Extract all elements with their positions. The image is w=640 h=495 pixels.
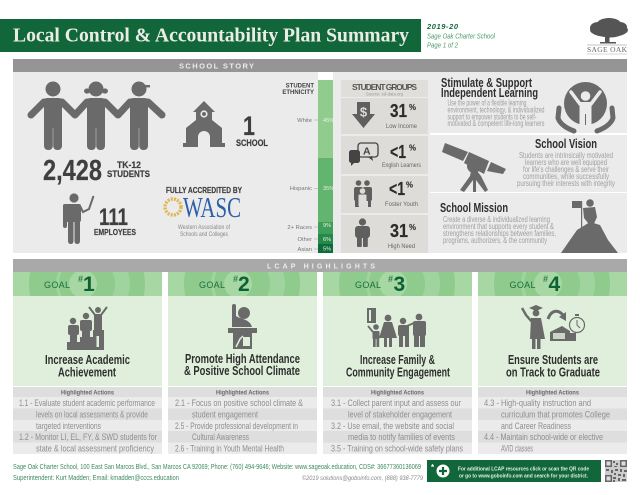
stat: english learners: %: [409, 144, 416, 152]
panel: goal 4: 4: [548, 273, 560, 296]
school year and page info: 2019-20: [426, 22, 459, 31]
stat: students: [43, 155, 150, 187]
panel: school mission: programs, authorizers, & the community: [443, 236, 547, 245]
stat: low income: Low Income: [386, 123, 417, 130]
chart: student ethnicity stacked bar: 35%: [323, 186, 334, 192]
school year and page info: Page 1 of 2: [427, 40, 459, 50]
panel: goal 1: Achievement: [58, 366, 117, 380]
panel: independent learning: environment, technology, & individualized: [448, 106, 544, 114]
stat: english learners: English Learners: [382, 162, 422, 169]
stat: low income: [352, 100, 417, 130]
panel: school vision: [430, 135, 627, 192]
accreditation: WASC: FULLY ACCREDITED BY: [166, 186, 243, 195]
panel: independent learning: support to empower students to be self-: [448, 112, 537, 122]
stat: students: STUDENTS: [107, 169, 150, 180]
QR code: [605, 460, 627, 482]
school year and page info: [426, 22, 495, 50]
chart: student ethnicity stacked bar: 6%: [323, 237, 331, 243]
stat: foster youth: [354, 178, 418, 208]
panel: goal 4: and Career Readiness: [501, 421, 571, 431]
chart: student ethnicity stacked bar: STUDENT: [286, 84, 314, 90]
icon: climber on mountain: [561, 199, 618, 253]
chart: student ethnicity stacked bar: White: [297, 118, 312, 124]
panel: goal 1: 1: [83, 273, 95, 296]
panel: goal 2: #: [233, 274, 238, 284]
panel: goal 4: 4.4 - Maintain school-wide or elective: [484, 432, 603, 442]
panel: goal 3: [323, 272, 472, 454]
logo: Sage Oak tree: [587, 18, 628, 54]
stat: high need: 31: [390, 220, 408, 241]
icon: family and doorway: [367, 308, 426, 347]
stat: one school: 1: [243, 111, 255, 141]
panel: goal 4: #: [543, 274, 548, 284]
panel: goal 1: state & local assessment proficiency: [36, 444, 154, 454]
callout: additional resources: or go to www.goboinfo.com and search for your district.: [459, 474, 588, 480]
chart: student ethnicity stacked bar: Hispanic: [290, 186, 312, 192]
panel: goal 1: Increase Academic: [45, 353, 130, 367]
panel: student groups: Source: ed-data.org: [366, 92, 403, 98]
panel: school vision: pursuing their interests with integrity: [517, 179, 615, 188]
panel: goal 3: media to notify families of events: [348, 432, 455, 442]
icon: three children: [31, 82, 162, 150]
title banner: [0, 19, 421, 52]
panel: student groups: STUDENT GROUPS: [352, 82, 417, 92]
panel: goal 3: GOAL: [355, 280, 381, 290]
stat: students: TK-12: [117, 160, 141, 171]
panel: goal 4: 4.3 - High-quality instruction and: [484, 398, 591, 408]
stat: foster youth: <1: [389, 178, 405, 199]
logo: Sage Oak tree: SAGE OAK: [587, 45, 628, 54]
panel: goal 4: on Track to Graduate: [506, 366, 600, 380]
panel: goal 3: 3.5 - Training on school-wide safety plans: [331, 444, 463, 454]
panel: school vision: learners who are well equipped: [525, 158, 607, 167]
panel: goal 4: GOAL: [510, 280, 536, 290]
callout: additional resources: [427, 460, 601, 482]
stat: english learners: <1: [390, 141, 406, 162]
stat: one school: [236, 111, 268, 149]
panel: independent learning: motivated & competent life-long learners: [448, 119, 545, 128]
icon: schoolhouse: [183, 101, 225, 147]
panel: goal 2: GOAL: [199, 280, 225, 290]
panel: goal 3: Increase Family &: [360, 353, 435, 367]
heading: school story: [13, 59, 627, 72]
panel: goal 3: 3.2 - Use email, the website and social: [331, 421, 454, 431]
icon: hands holding learner: [558, 82, 613, 131]
panel: goal 2: student engagement: [192, 410, 258, 420]
icon: students on podium: [67, 307, 107, 350]
panel: school vision: communities, while successfully: [523, 172, 609, 181]
chart: student ethnicity stacked bar: 5%: [323, 246, 331, 252]
stat: employees: 111: [99, 204, 128, 231]
panel: school vision: for life's challenges & serve their: [523, 165, 609, 174]
panel: goal 1: targeted interventions: [36, 421, 101, 431]
stat: high need: %: [409, 223, 416, 232]
chart: student ethnicity stacked bar: Asian: [297, 247, 312, 253]
panel: goal 1: Highlighted Actions: [61, 390, 114, 396]
heading: LCAP highlights: [13, 259, 627, 272]
panel: goal 1: #: [78, 274, 83, 284]
panel: goal 2: [168, 272, 317, 454]
panel: goal 3: #: [388, 274, 393, 284]
panel: goal 4: AVID classes: [501, 444, 533, 454]
panel: goal 1: 1.2 - Monitor LI, EL, FY, & SWD students for: [19, 432, 157, 442]
panel: goal 1: 1.1 - Evaluate student academic performance: [19, 398, 155, 408]
accreditation: WASC: Western Association of: [178, 225, 230, 231]
stat: low income: $: [360, 104, 368, 120]
stat: high need: High Need: [388, 243, 415, 250]
panel: goal 2: 2.5 - Provide professional development in: [175, 421, 298, 431]
stat: low income: 31: [390, 100, 407, 121]
panel: goal 4: [478, 272, 627, 454]
icon: teacher: [63, 193, 94, 244]
chart: student ethnicity stacked bar: Other: [298, 237, 312, 243]
heading: LCAP highlights: LCAP HIGHLIGHTS: [267, 264, 375, 270]
stat: foster youth: %: [406, 180, 413, 190]
stat: english learners: A: [363, 146, 371, 158]
panel: school mission: School Mission: [440, 201, 508, 215]
icon: telescope: [442, 143, 506, 192]
callout: additional resources: *: [431, 463, 435, 472]
callout: additional resources: For additional LCAP resources click or scan the QR code: [458, 466, 590, 472]
footer: contact information: [13, 462, 421, 482]
panel: student groups: [341, 80, 428, 253]
accreditation: WASC: Schools and Colleges: [180, 232, 228, 238]
panel: school mission: [430, 193, 627, 253]
heading: school story: SCHOOL STORY: [179, 62, 254, 70]
panel: goal 2: 2.6 - Training in Youth Mental Health: [175, 444, 284, 454]
panel: school mission: strengthens relationships between families,: [443, 229, 556, 238]
stat: low income: %: [409, 103, 416, 112]
chart: student ethnicity stacked bar: [282, 80, 334, 253]
panel: goal 2: Highlighted Actions: [216, 390, 269, 396]
panel: goal 1: levels on local assessments & provide: [36, 410, 148, 420]
icon: graduate, school and clock: [522, 305, 584, 349]
panel: goal 2: & Positive School Climate: [184, 364, 300, 378]
panel: goal 3: Community Engagement: [346, 366, 451, 380]
footer: contact information: Sage Oak Charter School, 100 East San Marcos Blvd., San Marcos CA 92069; Phone: (760) 494-9646; Website: www.sageoak.education, CDS#: 36677360136069: [13, 462, 421, 471]
panel: goal 4: Ensure Students are: [508, 353, 598, 367]
footer: copyright: ©2019 solutions@goboinfo.com, (888) 938-7779: [302, 474, 423, 482]
school year and page info: Sage Oak Charter School: [427, 32, 495, 40]
stat: students: 2,428: [43, 155, 102, 187]
stat: employees: EMPLOYEES: [94, 227, 136, 237]
panel: school vision: Students are intrinsically motivated: [519, 151, 613, 160]
panel: goal 3: 3: [394, 273, 405, 296]
panel: goal 3: Highlighted Actions: [371, 390, 424, 396]
accreditation: WASC: [165, 186, 243, 238]
title banner: Local Control & Accountability Plan Summary: [13, 26, 409, 46]
chart: student ethnicity stacked bar: 2+ Races: [287, 225, 312, 231]
panel: independent learning: Stimulate & Support: [441, 76, 533, 90]
panel: independent learning: Use the power of a flexible learning: [448, 98, 526, 108]
panel: goal 3: 3.1 - Collect parent input and assess our: [331, 398, 461, 408]
panel: independent learning: Independent Learning: [441, 86, 538, 100]
stat: high need: [355, 218, 416, 250]
chart: student ethnicity stacked bar: ETHNICITY: [282, 90, 314, 96]
panel: goal 1: GOAL: [44, 280, 70, 290]
panel: goal 2: Promote High Attendance: [185, 352, 300, 366]
accreditation: WASC: WASC: [183, 193, 241, 224]
stat: english learners: [349, 141, 422, 169]
icon: student raising hand at podium: [228, 304, 257, 349]
panel: goal 2: Cultural Awareness: [192, 432, 249, 442]
panel: goal 2: 2: [238, 273, 250, 296]
panel: goal 4: curriculum that promotes College: [501, 410, 610, 420]
panel: goal 2: 2.1 - Focus on positive school climate &: [175, 398, 303, 408]
panel: goal 4: Highlighted Actions: [526, 390, 579, 396]
chart: student ethnicity stacked bar: 9%: [323, 223, 331, 229]
panel: school mission: environment that supports every student &: [443, 222, 555, 231]
panel: school story background: [13, 72, 430, 253]
panel: independent learning: [430, 72, 627, 133]
stat: one school: SCHOOL: [236, 138, 268, 149]
panel: school mission: Create a diverse & individualized learning: [443, 215, 550, 224]
stat: foster youth: Foster Youth: [385, 201, 418, 208]
panel: school vision: School Vision: [535, 137, 597, 151]
footer: contact information: Superintendent: Kurt Madden; Email: kmadden@cccs.education: [13, 473, 179, 482]
panel: goal 3: level of stakeholder engagement: [348, 410, 452, 420]
panel: goal 1: [13, 272, 162, 454]
chart: student ethnicity stacked bar: 45%: [323, 118, 334, 124]
